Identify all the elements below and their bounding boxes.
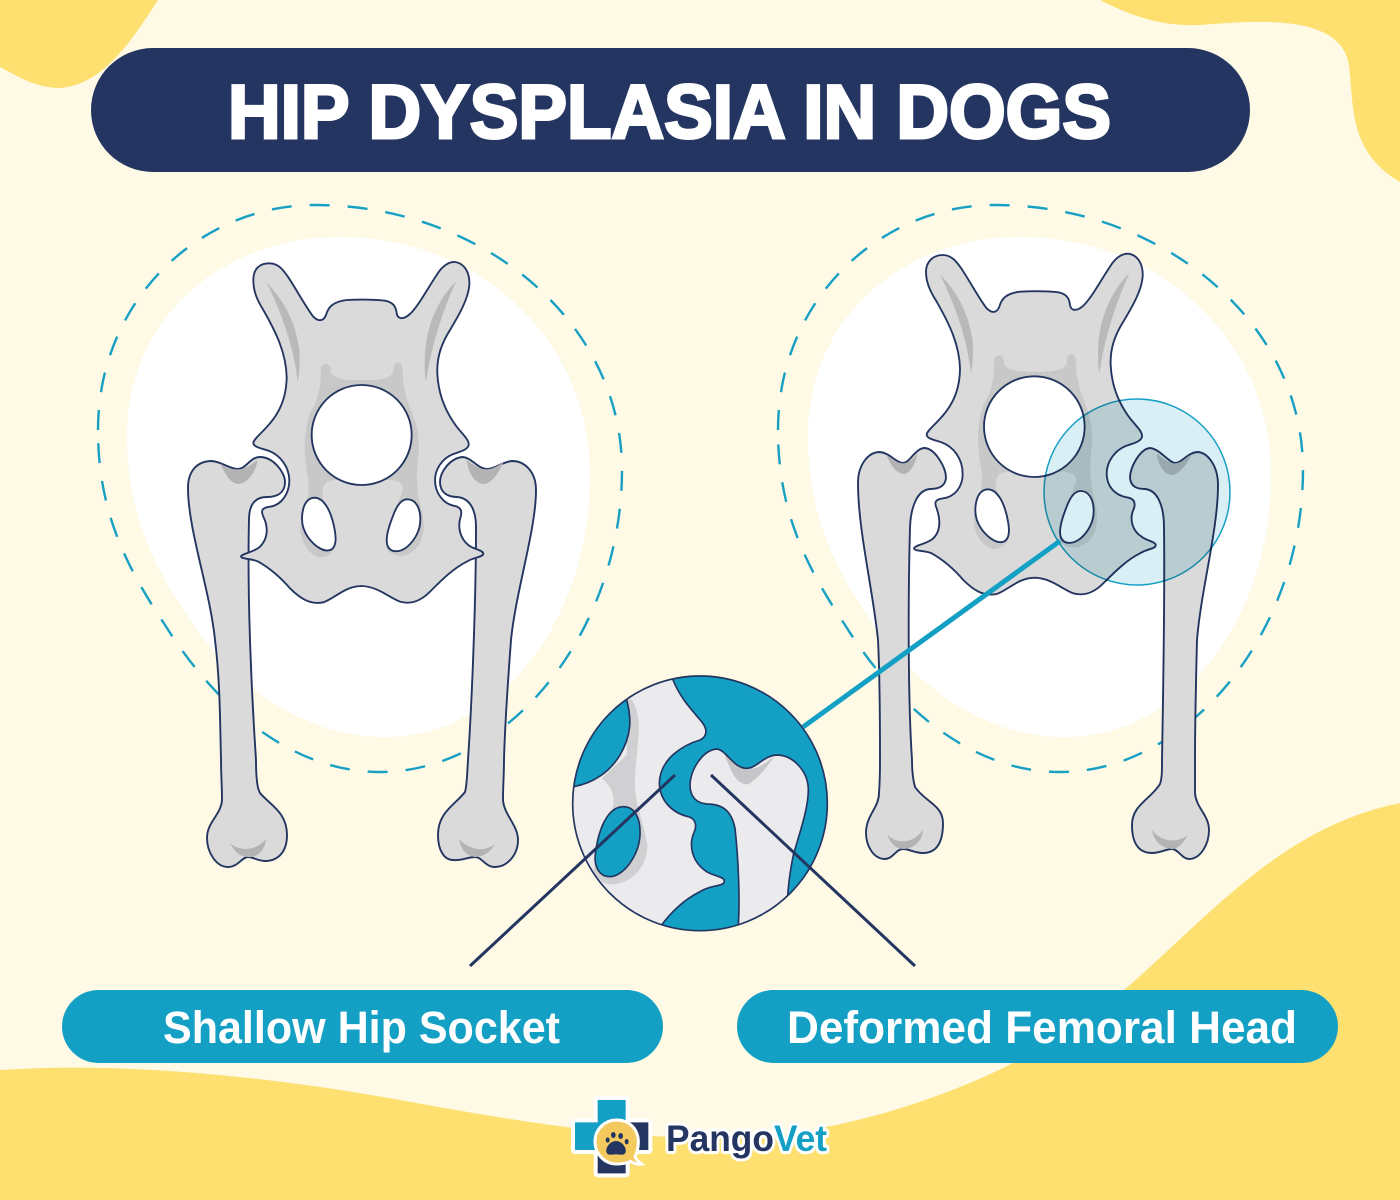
background blob: bottom bbox=[0, 803, 1400, 1200]
highlight circle over hip joint bbox=[1044, 399, 1230, 585]
dashed outline bbox=[98, 205, 622, 772]
background blob: top right bbox=[1100, 0, 1400, 182]
background blob: top left bbox=[0, 0, 158, 88]
white backdrop blob bbox=[808, 237, 1271, 737]
pointer line: deformed femoral head bbox=[711, 775, 915, 966]
title text: HIP DYSPLASIA IN DOGS bbox=[228, 70, 1111, 155]
logo wordmark: PangoVet bbox=[666, 1118, 827, 1159]
label pill: shallow hip socket bbox=[62, 990, 663, 1063]
logo icon bbox=[575, 1100, 648, 1173]
magnified joint detail bbox=[567, 675, 833, 942]
panel: healthy hips bbox=[98, 205, 622, 867]
left femur condyle shading bbox=[887, 830, 923, 849]
right femur bbox=[438, 457, 536, 867]
joint space in teal bbox=[659, 675, 833, 942]
shading inside magnifier bbox=[593, 698, 647, 884]
panel: dysplastic hips bbox=[778, 205, 1303, 859]
right femur condyle shading bbox=[1152, 830, 1188, 849]
dashed outline bbox=[778, 205, 1303, 772]
white backdrop blob bbox=[127, 237, 590, 737]
label pill: deformed femoral head bbox=[737, 990, 1338, 1063]
obturator opening bbox=[595, 807, 640, 877]
pointer line: shallow hip socket bbox=[470, 775, 675, 966]
label pill: deformed femoral head: Deformed Femoral Head bbox=[787, 1002, 1297, 1053]
pelvis bbox=[887, 254, 1192, 595]
title banner bbox=[91, 48, 1250, 172]
logo: PangoVet bbox=[575, 1100, 827, 1173]
magnifier ring bbox=[573, 676, 827, 931]
left femur condyle shading bbox=[230, 839, 266, 857]
connector line to magnifier bbox=[803, 541, 1060, 727]
left femur bbox=[858, 448, 946, 859]
right femur condyle shading bbox=[459, 839, 495, 857]
pelvis bbox=[220, 262, 503, 603]
left femur bbox=[188, 457, 287, 867]
right femur bbox=[1130, 448, 1218, 859]
label pill: shallow hip socket: Shallow Hip Socket bbox=[163, 1002, 560, 1053]
